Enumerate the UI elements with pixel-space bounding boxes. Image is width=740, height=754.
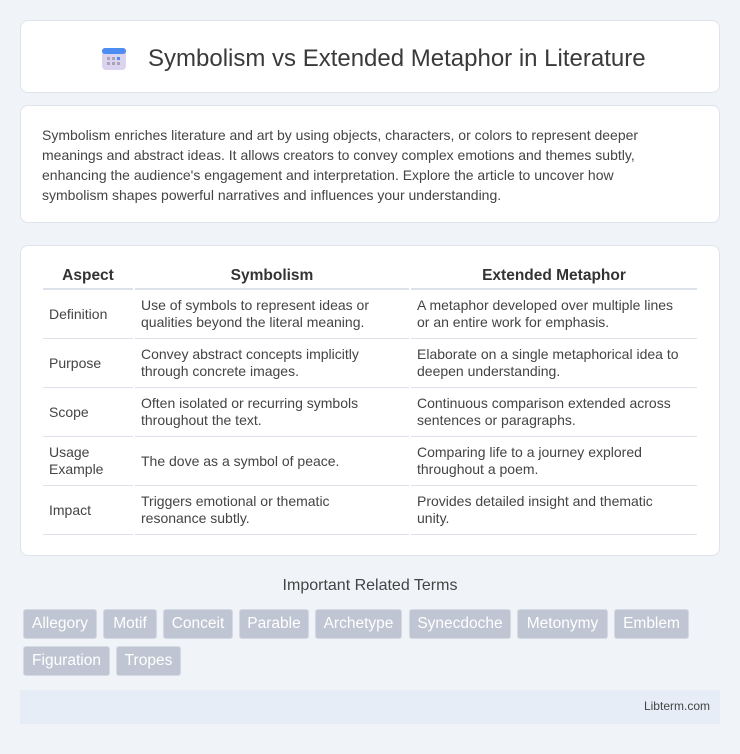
- tags: Metonymy: [527, 615, 598, 632]
- related terms heading: Important Related Terms: [283, 577, 457, 594]
- tags: Synecdoche: [417, 615, 503, 632]
- intro text: Symbolism enriches literature and art by using objects, characters, or colors to represent deeper meanings and abstract ideas. It allows creators to convey complex emotions and themes subtly, enhancing the audience's engagement and interpretation. Explore the article to uncover how symbolism shapes powerful narratives and influences your understanding.: [42, 127, 638, 203]
- tags: Allegory: [32, 615, 88, 632]
- comparison table: Usage Example: [49, 444, 103, 477]
- title: Symbolism vs Extended Metaphor in Literature: [148, 45, 646, 72]
- comparison table: Continuous comparison extended across sentences or paragraphs.: [417, 395, 671, 428]
- comparison table: Purpose: [49, 354, 101, 370]
- title card: [20, 20, 720, 93]
- comparison table: [20, 245, 720, 556]
- tags: Conceit: [172, 615, 224, 632]
- comparison table: A metaphor developed over multiple lines or an entire work for emphasis.: [417, 297, 673, 330]
- comparison table: Convey abstract concepts implicitly through concrete images.: [141, 346, 359, 379]
- tags: Emblem: [623, 615, 680, 632]
- footer: [20, 690, 720, 724]
- comparison table: Symbolism: [231, 267, 313, 284]
- comparison table: Scope: [49, 404, 89, 420]
- comparison table: The dove as a symbol of peace.: [141, 452, 339, 468]
- tags: Parable: [247, 615, 301, 632]
- comparison table: Impact: [49, 502, 91, 518]
- icon: calendar: [102, 48, 126, 70]
- footer: Libterm.com: [644, 699, 710, 713]
- tags: Tropes: [125, 652, 172, 669]
- comparison table: Elaborate on a single metaphorical idea to deepen understanding.: [417, 346, 679, 379]
- comparison table: Triggers emotional or thematic resonance subtly.: [141, 493, 330, 526]
- tags: Figuration: [32, 652, 101, 669]
- comparison table: Definition: [49, 306, 107, 322]
- comparison table: Use of symbols to represent ideas or qualities beyond the literal meaning.: [141, 297, 369, 330]
- tags: Archetype: [324, 615, 393, 632]
- comparison table: Aspect: [62, 267, 114, 284]
- comparison table: Extended Metaphor: [482, 267, 626, 284]
- tags: Motif: [113, 615, 147, 632]
- comparison table: Provides detailed insight and thematic unity.: [417, 493, 653, 526]
- intro text: [20, 105, 720, 223]
- comparison table: Comparing life to a journey explored throughout a poem.: [417, 444, 642, 477]
- comparison table: Often isolated or recurring symbols throughout the text.: [141, 395, 358, 428]
